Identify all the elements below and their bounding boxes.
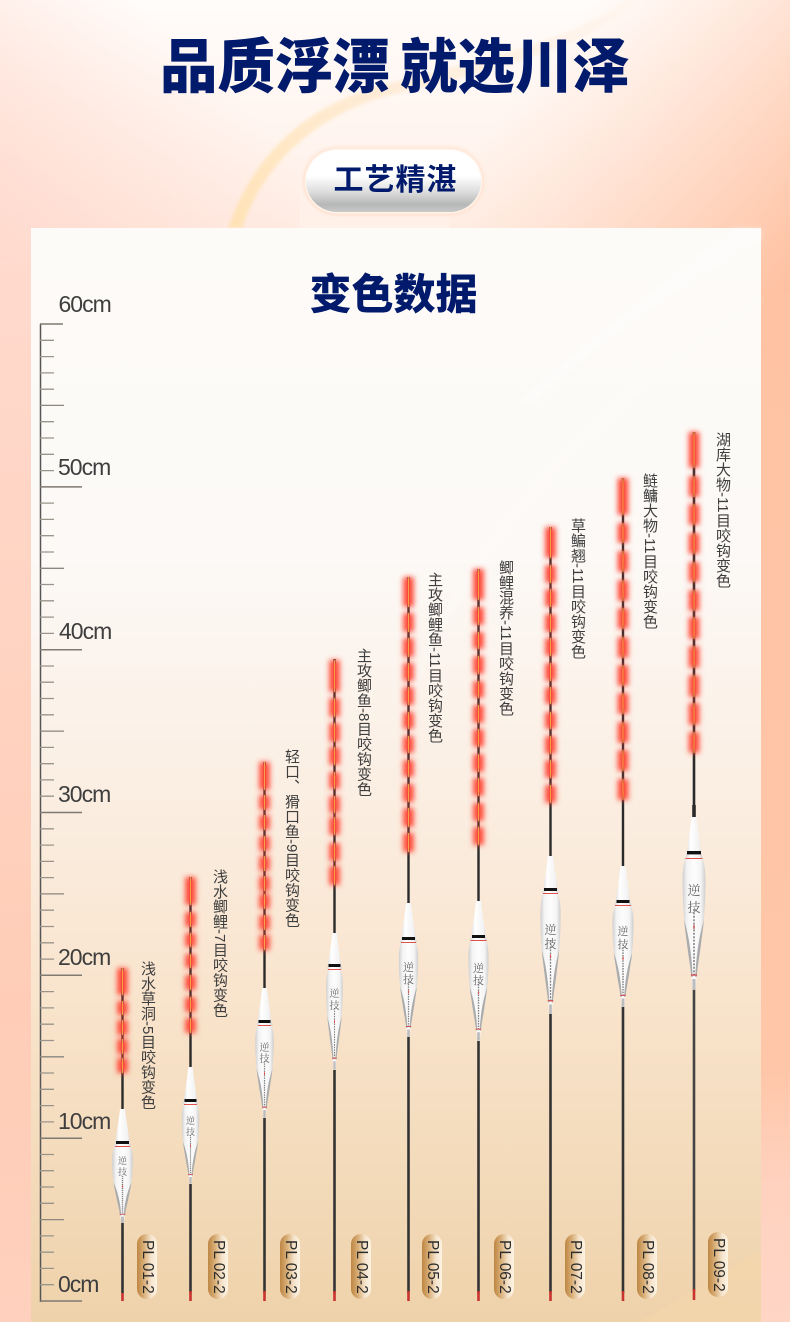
model tag: PL 07-2: PL 07-2: [567, 1240, 584, 1293]
label: PL 04 use: 主攻鲫鱼-8目咬钩变色: [355, 648, 372, 796]
label: PL 03 use: 轻口、猾口鱼-9目咬钩变色: [283, 749, 300, 927]
float: PL 05-2: [399, 577, 418, 1301]
model tag: PL 06-2: PL 06-2: [496, 1240, 513, 1293]
float: PL 06-2: [468, 569, 489, 1301]
model tag: PL 09-2: PL 09-2: [710, 1238, 727, 1291]
label: PL 07 use: 草鳊翘-11目咬钩变色: [569, 518, 586, 659]
section button: [306, 150, 481, 212]
float: PL 01-2: 逆: [118, 1154, 127, 1167]
float: PL 09-2: 技: [687, 897, 701, 916]
float: PL 01-2: 技: [118, 1165, 127, 1178]
decorative swoosh: [228, 0, 640, 228]
float: PL 08-2: 技: [618, 936, 628, 952]
label: PL 05 use: 主攻鲫鲤鱼-11目咬钩变色: [426, 572, 443, 743]
panel: data background: [31, 228, 761, 1322]
label: PL 01 use: 浅水草洞-5目咬钩变色: [139, 961, 156, 1109]
float: PL 02-2: [182, 877, 199, 1301]
float: PL 05-2: 逆: [403, 959, 414, 975]
float: PL 05-2: 技: [403, 971, 414, 987]
model tag: PL 01-2: PL 01-2: [139, 1240, 156, 1293]
float: PL 07-2: 逆: [544, 921, 557, 938]
ruler: 0cm: [58, 1271, 98, 1297]
float: PL 02-2: 逆: [186, 1114, 195, 1127]
float: PL 03-2: [255, 762, 274, 1301]
label: PL 08 use: 鲢鳙大物-11目咬钩变色: [641, 473, 658, 629]
ruler: 20cm: [58, 944, 110, 970]
model tag: PL 03-2: PL 03-2: [282, 1240, 299, 1293]
section button: 工艺精湛: [334, 164, 458, 197]
float: PL 08-2: [612, 478, 634, 1301]
model tag: PL 02-2: PL 02-2: [210, 1240, 227, 1293]
float: PL 03-2: 技: [260, 1050, 270, 1065]
label: PL 02 use: 浅水鲫鲤-7目咬钩变色: [211, 869, 228, 1017]
float: PL 06-2: 逆: [473, 960, 484, 976]
float: PL 03-2: 逆: [260, 1039, 270, 1054]
panel heading: 变色数据: [309, 271, 478, 318]
ruler: 40cm: [59, 618, 111, 644]
label: PL 06 use: 鲫鲤混养-11目咬钩变色: [497, 560, 514, 716]
model tag: PL 08-2: PL 08-2: [639, 1240, 656, 1293]
label: PL 09 use: 湖库大物-11目咬钩变色: [714, 432, 731, 588]
float: PL 09-2: 逆: [687, 880, 701, 899]
ruler: 10cm: [58, 1108, 110, 1134]
float: PL 04-2: [326, 659, 343, 1301]
float: PL 09-2: [683, 432, 705, 1300]
float: PL 07-2: 技: [544, 935, 557, 952]
ruler: [40, 291, 111, 1302]
ruler: 50cm: [58, 454, 110, 480]
float: PL 08-2: 逆: [618, 923, 628, 939]
float: PL 04-2: 逆: [330, 985, 340, 1000]
ruler: 60cm: [58, 291, 111, 317]
float: PL 04-2: 技: [330, 997, 340, 1012]
float: PL 01-2: [112, 968, 133, 1301]
float: PL 07-2: [540, 527, 561, 1301]
float: PL 02-2: 技: [186, 1125, 195, 1138]
model tag: PL 04-2: PL 04-2: [353, 1240, 370, 1293]
float: PL 06-2: 技: [473, 972, 484, 988]
title: 品质浮漂 就选川泽: [160, 35, 630, 101]
model tag: PL 05-2: PL 05-2: [424, 1240, 441, 1293]
ruler: 30cm: [58, 781, 110, 807]
